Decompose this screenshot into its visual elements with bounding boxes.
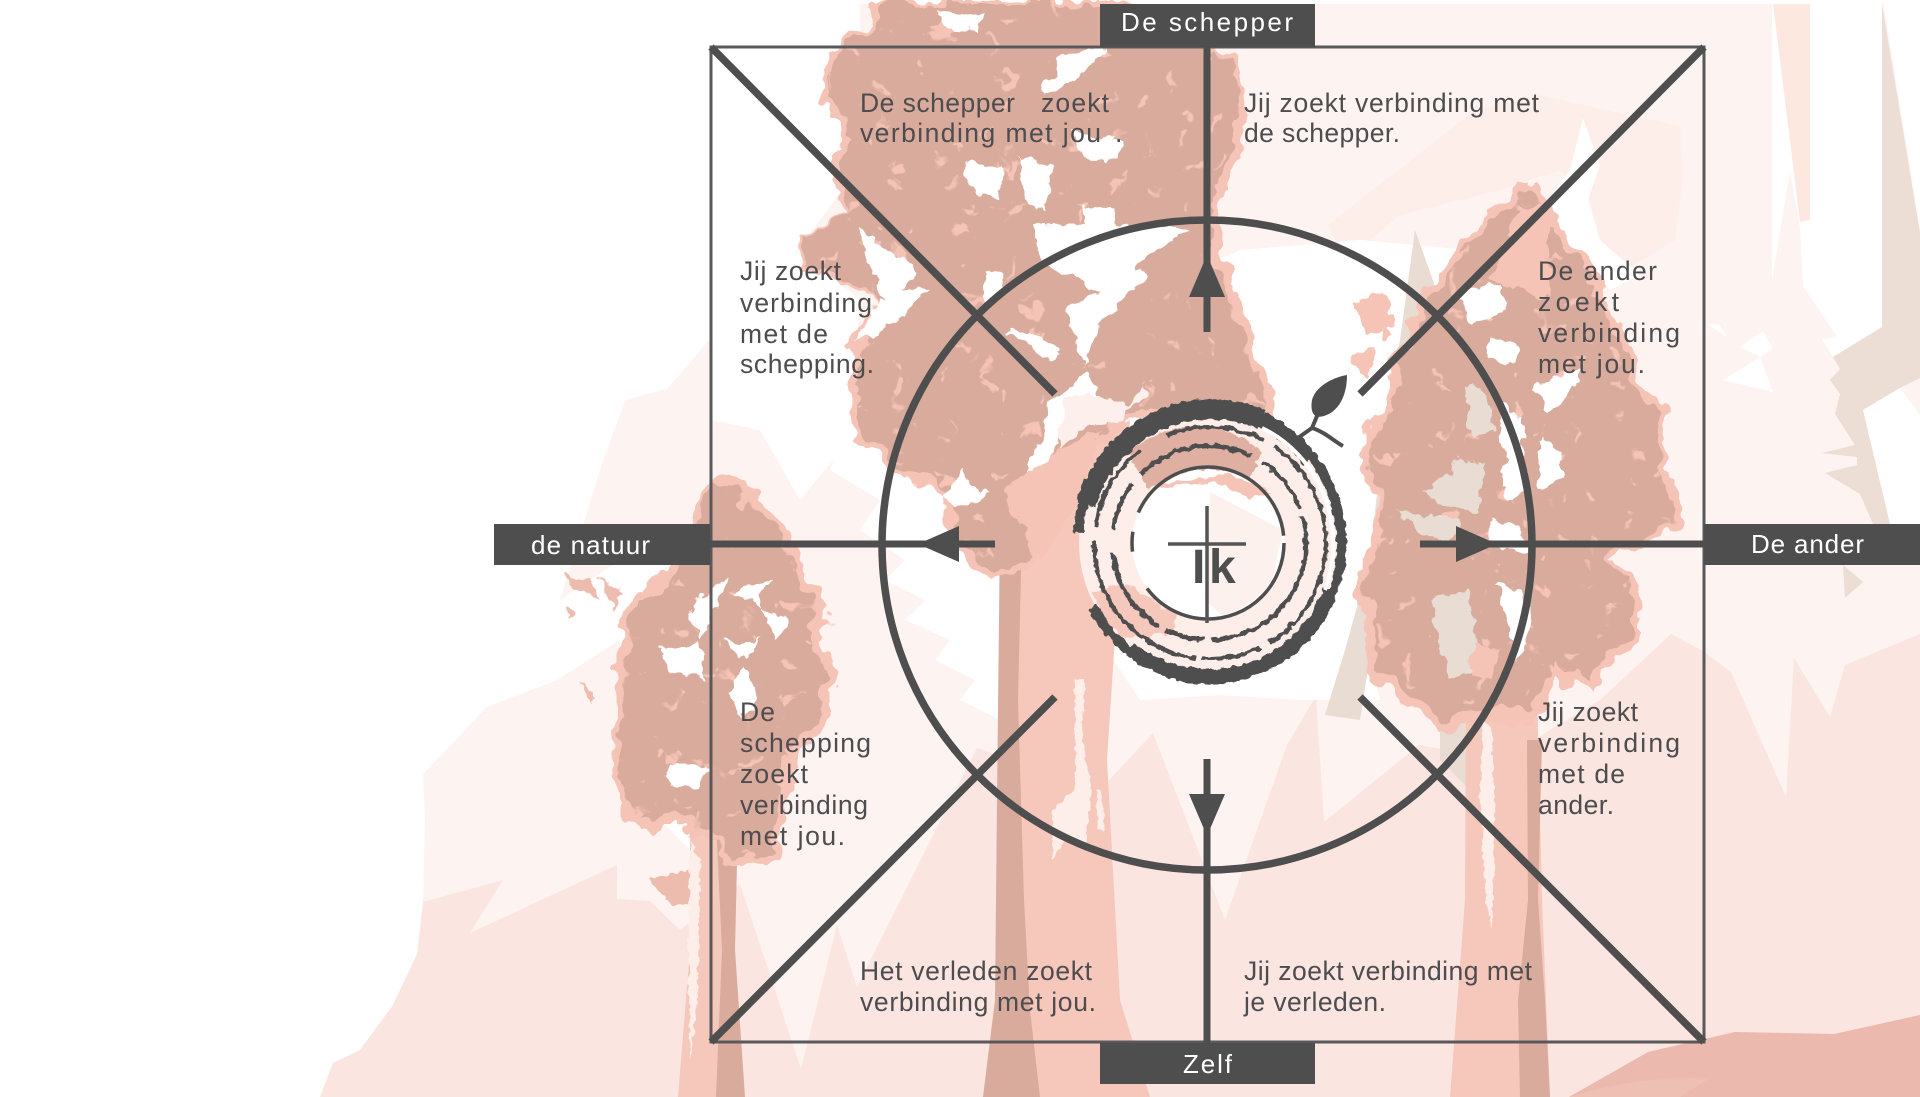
arrow: up to De schepper <box>1189 46 1225 332</box>
text: Het verleden zoekt verbinding met jou <box>860 956 1096 1017</box>
left trunk bark <box>688 840 700 1060</box>
white gaps left tree <box>660 580 790 790</box>
text: Jij zoekt verbinding met de schepping: verbinding <box>740 288 872 318</box>
text: Jij zoekt verbinding met de schepper <box>1244 88 1540 148</box>
white gaps lower left crown <box>855 270 1005 505</box>
diagonal bottom left <box>711 697 1055 1042</box>
cross <box>1168 506 1246 623</box>
text: De schepping zoekt verbinding met jou: met jou. <box>740 821 845 851</box>
text: De schepper zoekt verbinding met jou: zoekt <box>1041 88 1110 118</box>
white gaps central crown <box>860 10 1190 310</box>
trunk bark texture <box>688 680 1495 1060</box>
foliage main tone <box>618 4 1672 858</box>
foliage halo <box>610 0 1682 866</box>
label bar: Zelf: Zelf <box>1183 1049 1233 1079</box>
diagram: square frame <box>711 47 1704 1042</box>
peach wedge top right <box>1773 4 1810 222</box>
text: Jij zoekt verbinding met de schepping: met de <box>740 319 828 349</box>
beige patches near the right tree <box>1325 230 1510 800</box>
text: De ander zoekt verbinding met jou <box>1538 256 1680 379</box>
tree ring thick upper left bark <box>1086 409 1262 505</box>
text: Jij zoekt verbinding met de schepper: Jij zoekt verbinding met <box>1244 88 1540 118</box>
peach haze upper right <box>1328 95 1683 280</box>
left trunk dark stripe <box>716 820 745 1097</box>
text: De schepping zoekt verbinding met jou: verbinding <box>740 790 868 820</box>
arrow: left to de natuur <box>710 526 995 562</box>
Ik label: I <box>1192 541 1205 594</box>
arrow: right to De ander <box>1420 526 1705 562</box>
central tree trunk <box>1000 420 1150 1097</box>
label bar: de natuur <box>494 524 710 565</box>
text: Jij zoekt verbinding met de ander: met de <box>1538 759 1625 789</box>
pink wash over the top of the rings <box>1150 476 1268 500</box>
text: Jij zoekt verbinding met je verleden <box>1243 956 1533 1017</box>
label bar: De ander <box>1704 524 1920 565</box>
white top right corner <box>1883 0 1920 230</box>
text: Jij zoekt verbinding met je verleden: je verleden. <box>1243 987 1386 1017</box>
text: De schepping zoekt verbinding met jou <box>740 697 871 851</box>
white clearing inside the circle <box>1090 240 1470 700</box>
text: De ander zoekt verbinding met jou: De ander <box>1538 256 1657 286</box>
white shards right <box>1707 324 1773 392</box>
pink shoulder of the central trunk <box>1000 430 1100 560</box>
pink speckles right of the ring <box>1350 295 1500 680</box>
tree ring band 4 <box>1132 467 1284 619</box>
white clearing left upper <box>710 250 860 500</box>
forest floor <box>320 634 1920 1097</box>
text: De schepping zoekt verbinding met jou: De <box>740 697 775 727</box>
tree ring band 3 <box>1112 446 1306 640</box>
foliage showing through the rings <box>1128 426 1262 490</box>
text: Jij zoekt verbinding met de schepping: Jij zoekt <box>740 256 842 286</box>
central trunk bark <box>1052 680 1104 860</box>
label bar: De schepper: De schepper <box>1121 7 1293 37</box>
text: De ander zoekt verbinding met jou: met jou. <box>1538 349 1645 379</box>
white clearing lower right edge <box>1863 388 1920 524</box>
text: Jij zoekt verbinding met de ander: verbinding <box>1538 728 1680 758</box>
text: De schepper zoekt verbinding met jou: . <box>1115 118 1122 148</box>
white seam on the right <box>1262 428 1333 590</box>
hill highlight <box>1569 1078 1710 1097</box>
label bar: Zelf <box>1100 1043 1315 1084</box>
right trunk dark stripe <box>1518 740 1550 1097</box>
text: De ander zoekt verbinding met jou: verbinding <box>1538 318 1680 348</box>
text: Jij zoekt verbinding met de ander: ander. <box>1538 790 1614 820</box>
diagonal top right <box>1360 47 1704 394</box>
tree ring pale wood fill <box>1107 440 1313 646</box>
tree ring band 2 <box>1094 427 1326 659</box>
text: De schepper zoekt verbinding met jou: De schepper <box>860 88 1015 118</box>
central trunk dark stripe <box>983 530 1040 1097</box>
white clearing left of the trunk <box>830 420 1000 720</box>
trees foliage <box>610 0 1682 866</box>
gaps and highlights in the foliage <box>560 10 1585 905</box>
text: Jij zoekt verbinding met de schepping: schepping. <box>740 349 874 379</box>
pink wash lower left of the rings <box>1095 585 1178 640</box>
tree ring heart <box>1132 467 1284 619</box>
white channel through the central crown <box>1010 262 1145 485</box>
icon: leaf stem <box>1295 416 1343 446</box>
Ik label: k <box>1209 541 1236 594</box>
text: De schepper zoekt verbinding met jou <box>860 88 1122 148</box>
pale band beside the channel <box>1060 385 1145 450</box>
white gaps right tree <box>1458 285 1585 660</box>
diagonal top left <box>711 47 1055 394</box>
text: Het verleden zoekt verbinding met jou: verbinding met jou. <box>860 987 1096 1017</box>
tree ring outer bark <box>1078 407 1342 679</box>
white strip along top right diagonal <box>1540 118 1640 290</box>
icon: tree ring with cross and Ik <box>1078 375 1347 679</box>
text: De schepping zoekt verbinding met jou: zoekt <box>740 759 809 789</box>
scattered twigs left of the left tree <box>560 572 695 905</box>
diagonal bottom right <box>1360 697 1704 1042</box>
hill bottom right <box>1569 1015 1920 1097</box>
text: Jij zoekt verbinding met de schepper: de schepper. <box>1244 118 1400 148</box>
tree ring bottom bark <box>1130 590 1330 675</box>
text: Jij zoekt verbinding met de schepping <box>740 256 874 379</box>
text: Jij zoekt verbinding met je verleden: Jij zoekt verbinding met <box>1244 956 1533 986</box>
tree trunks <box>678 420 1550 1097</box>
beige glimpses right tree <box>1395 385 1495 680</box>
tree ring thick top right shoulder <box>1262 420 1310 460</box>
text: Jij zoekt verbinding met de ander <box>1538 697 1680 820</box>
heart pale shading <box>1205 492 1283 618</box>
label bar: De schepper <box>1100 4 1315 47</box>
right tree trunk <box>1450 690 1550 1097</box>
pink highlight right tree <box>1490 205 1550 300</box>
text: De schepping zoekt verbinding met jou: schepping <box>740 728 871 758</box>
label bar: De ander: De ander <box>1751 529 1864 559</box>
beige rock shape right <box>1822 4 1920 524</box>
text: Jij zoekt verbinding met de ander: Jij zoekt <box>1538 697 1639 727</box>
text: Het verleden zoekt verbinding met jou: Het verleden zoekt <box>860 956 1093 986</box>
label bar: de natuur: de natuur <box>531 530 650 560</box>
diagram: large circle <box>882 220 1532 870</box>
arrow: down to Zelf <box>1189 759 1225 1044</box>
white clearing right top <box>1772 4 1882 357</box>
text: De schepper zoekt verbinding met jou: verbinding met jou <box>860 118 1101 148</box>
text: De ander zoekt verbinding met jou: zoekt <box>1538 287 1620 317</box>
diagram: diagonals <box>711 47 1704 1042</box>
icon: leaf <box>1311 375 1347 417</box>
left tree trunk <box>678 800 740 1097</box>
white clearing around the left tree <box>560 540 720 850</box>
beige fragment under right label <box>1843 565 1863 598</box>
right trunk bark <box>1480 720 1495 930</box>
